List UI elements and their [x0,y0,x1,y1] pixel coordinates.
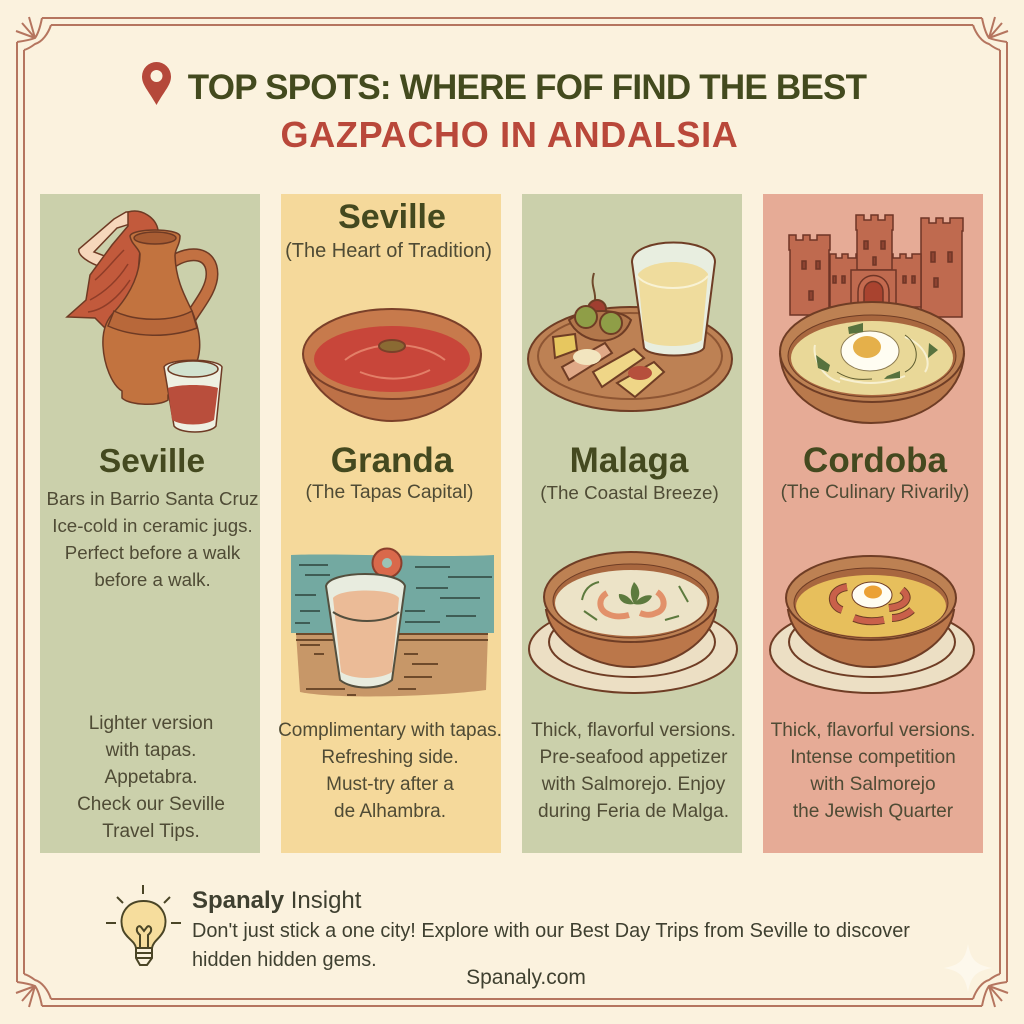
text: Granda tips: Must-try after a [326,774,454,795]
text: Seville tips: before a walk. [94,569,211,590]
heading: Spanaly Insight: Spanaly Insight [192,887,361,914]
heading: Seville column 2: Seville [338,198,446,236]
illustration: tapas board and glass [528,242,732,411]
text: Malaga tips: during Feria de Malga. [538,801,729,822]
text: Seville second block: Appetabra. [105,767,197,788]
subheading: Culinary Rivalry: (The Culinary Rivarily) [781,482,969,503]
illustration: shrimp soup bowl [529,552,737,693]
text: Cordoba tips [771,720,975,822]
subheading: Heart of Tradition: (The Heart of Tradition) [285,240,492,262]
decorative sparkle [944,944,992,992]
text: Seville second block: with tapas. [106,740,196,761]
panel: Cordoba column [763,194,983,853]
title: TOP SPOTS: WHERE FOF FIND THE BEST [188,68,866,107]
text: Cordoba tips: with Salmorejo [810,774,936,795]
text: Malaga tips: with Salmorejo. Enjoy [542,774,725,795]
text: Granda tips: Complimentary with tapas. [278,720,502,741]
panel: Seville column [40,194,260,853]
text: insight body [192,920,910,971]
text: Malaga tips [531,720,736,822]
text: Seville tips: Perfect before a walk [65,542,240,563]
heading: Seville column 1: Seville [99,443,205,480]
subheading: Tapas Capital: (The Tapas Capital) [306,482,473,503]
text: Seville tips: Bars in Barrio Santa Cruz [47,488,258,509]
icon: light bulb [106,885,181,965]
text: Granda tips: Refreshing side. [321,747,459,768]
heading: Malaga: Malaga [570,441,688,480]
illustration: gazpacho bowl [303,309,481,421]
subtitle: GAZPACHO IN ANDALSIA [280,114,738,155]
text: Seville tips: Ice-cold in ceramic jugs. [52,515,253,536]
illustration: castle [789,215,963,317]
text: Cordoba tips: Thick, flavorful versions. [771,720,975,741]
panel: Granada column [281,194,501,853]
text: Seville second block: Check our Seville [77,794,225,815]
text: Granda tips [278,720,502,822]
text: Seville second block: Lighter version [89,713,213,734]
text: Malaga tips: Thick, flavorful versions. [531,720,736,741]
subheading: Coastal Breeze: (The Coastal Breeze) [540,482,719,503]
text: insight body: hidden hidden gems. [192,949,377,971]
illustration: seaside glass [291,548,494,696]
text: insight body: Don't just stick a one city! Explore with our Best Day Trips from Seville to discover [192,920,910,942]
text: Granda tips: de Alhambra. [334,801,446,822]
icon: map pin [142,62,171,105]
heading: Cordoba: Cordoba [803,441,947,480]
heading: Granda: Granda [331,441,453,480]
illustration: chorizo soup bowl [770,556,974,693]
text: Seville second block: Travel Tips. [102,821,200,842]
text: Cordoba tips: Intense competition [790,747,956,768]
footer: website: Spanaly.com [466,966,586,989]
panel: Malaga column [522,194,742,853]
illustration: woman, jug and glass [67,211,222,432]
illustration: egg soup bowl [780,302,964,423]
text: Cordoba tips: the Jewish Quarter [793,801,953,822]
text: Seville second block [77,713,225,842]
text: Malaga tips: Pre-seafood appetizer [540,747,727,768]
text: Seville tips [47,488,258,590]
